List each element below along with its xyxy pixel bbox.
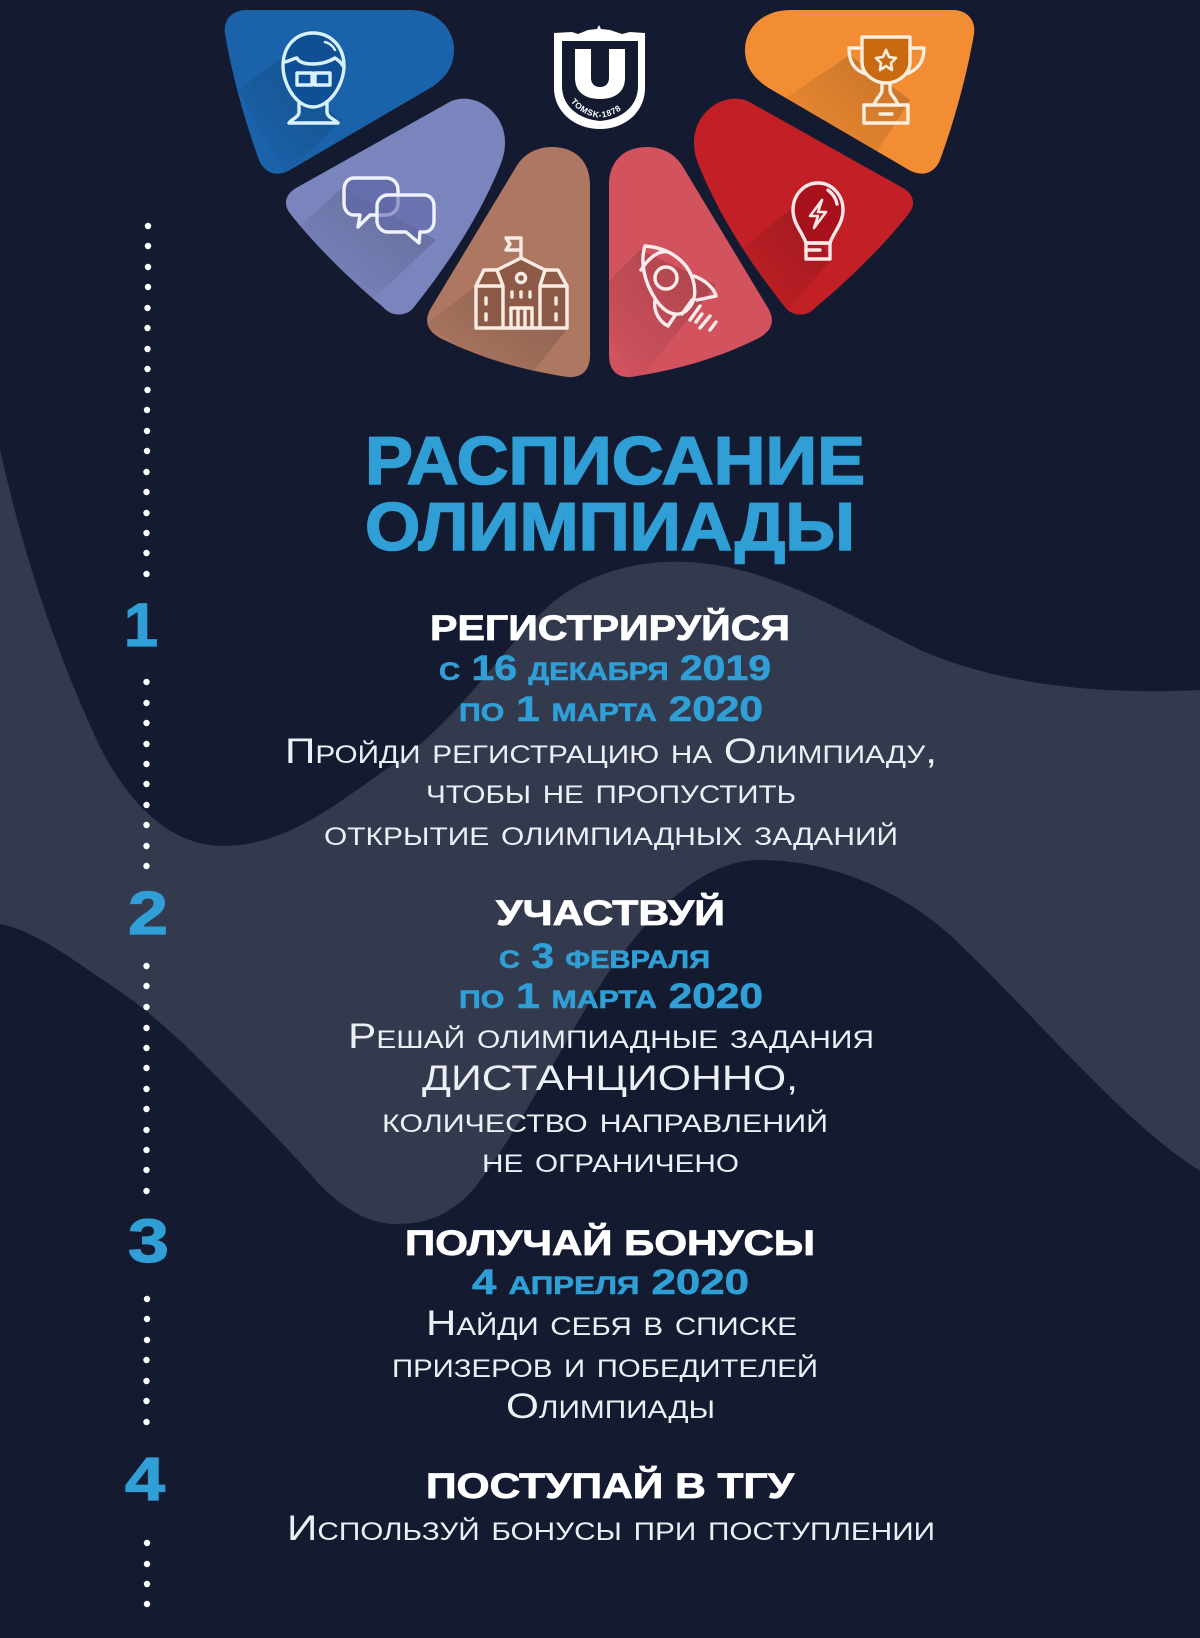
title: РАСПИСАНИЕ [365, 423, 865, 499]
step 2: participate: УЧАСТВУЙ [496, 893, 725, 933]
petal: orange, trophy icon [745, 10, 974, 175]
step 2: participate: по 1 марта 2020 [459, 977, 763, 1016]
step 3: bonuses: 4 апреля 2020 [472, 1263, 749, 1302]
step 2: participate: количество направлений [382, 1100, 828, 1140]
step 1: register: по 1 марта 2020 [459, 690, 763, 729]
icon: light bulb [793, 183, 843, 259]
step 2: participate: ДИСТАНЦИОННО, [422, 1058, 798, 1098]
petal: lilac, speech bubbles icon [286, 99, 505, 315]
petal: red, light bulb icon [694, 99, 913, 320]
step 3: bonuses: призеров и победителей [392, 1345, 818, 1385]
step 1: register: Пройди регистрацию на Олимпиаду, [285, 731, 937, 771]
logo caption: TOMSK-1878 [572, 98, 620, 118]
logo: Tomsk State University shield [554, 25, 645, 129]
icon: trophy [849, 37, 924, 123]
step 3: bonuses: Найди себя в списке [426, 1303, 797, 1343]
title [365, 423, 865, 565]
title: ОЛИМПИАДЫ [365, 489, 855, 565]
number 3: 3 [128, 1207, 169, 1275]
step 1: register: открытие олимпиадных заданий [324, 813, 898, 853]
number 4: 4 [125, 1445, 165, 1513]
step 3: bonuses: ПОЛУЧАЙ БОНУСЫ [405, 1223, 815, 1263]
step 2: participate [348, 893, 874, 1180]
petal: brown, university building icon [425, 147, 590, 385]
step 2: participate: не ограничено [482, 1140, 739, 1180]
icon: student with glasses [283, 33, 344, 123]
petal: blue, student icon [225, 10, 454, 175]
step 4: enrol: Используй бонусы при поступлении [287, 1508, 935, 1548]
step 3: bonuses: Олимпиады [506, 1386, 715, 1426]
step 4: enrol: ПОСТУПАЙ В ТГУ [426, 1466, 795, 1506]
step 1: register: РЕГИСТРИРУЙСЯ [430, 608, 790, 648]
step 1: register: с 16 декабря 2019 [439, 649, 771, 688]
icon: rocket [641, 246, 716, 330]
icon: speech bubbles [344, 178, 434, 243]
step 1: register: чтобы не пропустить [426, 771, 796, 811]
number 2: 2 [128, 879, 168, 947]
petal: pink, rocket icon [609, 147, 772, 378]
icon: university building [476, 238, 567, 328]
step 4: enrol [287, 1466, 935, 1548]
step 2: participate: Решай олимпиадные задания [348, 1016, 874, 1056]
timeline dots [143, 223, 151, 1607]
step 1: register [285, 608, 937, 853]
background wave [0, 449, 1200, 1224]
step 3: bonuses [392, 1223, 818, 1426]
number 1: 1 [124, 591, 158, 659]
step 2: participate: с 3 февраля [499, 937, 710, 976]
